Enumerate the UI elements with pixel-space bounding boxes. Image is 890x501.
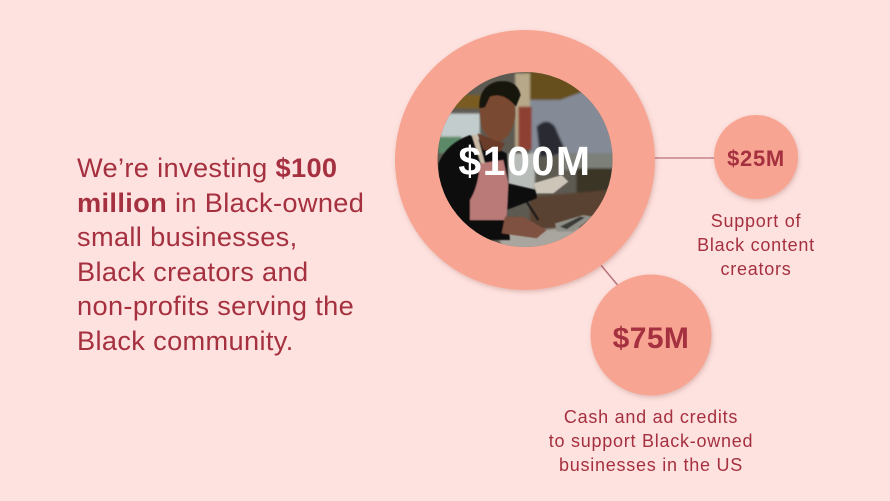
woman: torso: [438, 135, 537, 240]
caption: $75M: to support Black-owned: [549, 431, 753, 451]
intro text block: non-profits serving the: [77, 290, 354, 321]
connector: $100M to $75M: [600, 264, 620, 288]
caption: $75M: [549, 407, 753, 475]
photo: woman writing at a counter: [437, 70, 613, 250]
intro text block: million in Black-owned: [77, 187, 364, 218]
caption: $25M: creators: [720, 259, 792, 279]
caption: $25M: [697, 211, 815, 279]
intro text block: [77, 152, 364, 356]
caption: $25M: Black content: [697, 235, 815, 255]
intro text block: Black community.: [77, 325, 294, 356]
intro text block: We’re investing $100: [77, 152, 337, 183]
intro text block: small businesses,: [77, 221, 298, 252]
investment diagram: [394, 30, 801, 400]
circle: $75M: $75M: [613, 322, 689, 355]
outer circle $100M: [395, 30, 655, 290]
label: $100M: $100M: [458, 138, 592, 184]
circle: $75M: [590, 274, 712, 396]
caption: $75M: businesses in the US: [559, 455, 743, 475]
connector: $100M to $25M: [650, 157, 716, 159]
caption: $25M: Support of: [711, 211, 801, 231]
caption: $75M: Cash and ad credits: [564, 407, 738, 427]
circle: $25M: [714, 115, 798, 199]
circle: $25M: $25M: [727, 146, 785, 171]
intro text block: Black creators and: [77, 256, 308, 287]
